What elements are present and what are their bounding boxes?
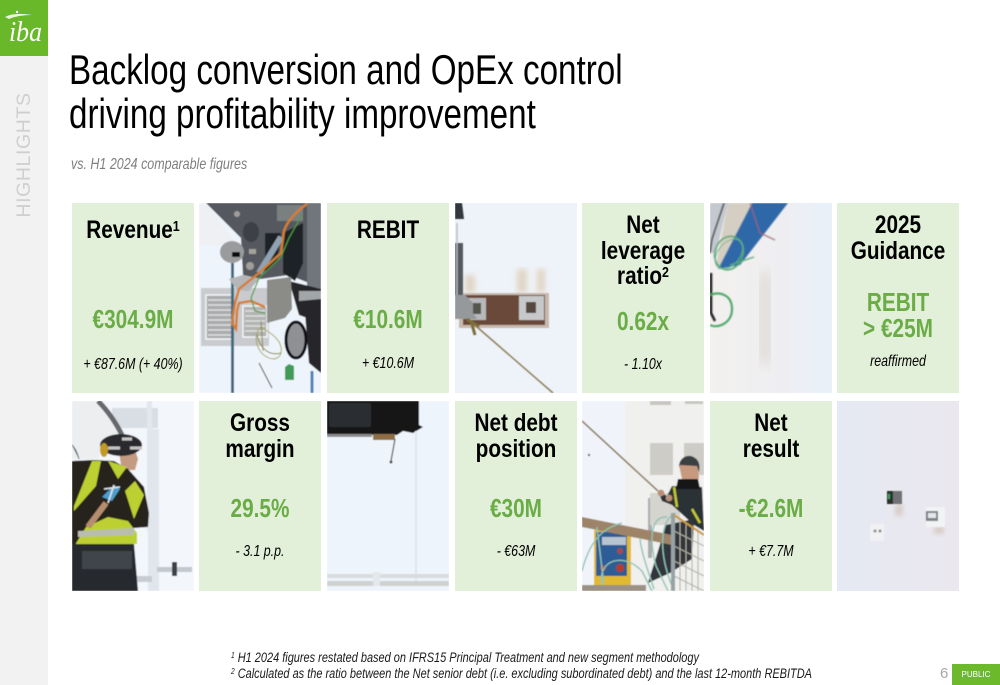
revenue value: €304.9M [93, 306, 173, 334]
guidance value [863, 289, 933, 342]
net leverage ratio heading [601, 211, 685, 290]
net result heading: Net [754, 409, 788, 437]
REBIT change: + €10.6M [362, 355, 414, 372]
net debt position heading [474, 409, 558, 462]
badge: public: PUBLIC [962, 670, 990, 679]
net debt position value: €30M [490, 495, 542, 523]
guidance heading: Guidance [851, 236, 945, 264]
gross margin heading: Gross [230, 409, 290, 437]
panel: REBIT [327, 203, 449, 393]
sidebar [0, 0, 48, 685]
logo: iba [9, 17, 42, 48]
gross margin heading: margin [225, 434, 295, 462]
title [69, 46, 623, 137]
guidance heading: 2025 [875, 211, 921, 239]
net leverage ratio change: - 1.10x [624, 356, 662, 373]
sidebar label: highlights: HIGHLIGHTS [13, 92, 35, 218]
badge: public [952, 664, 1000, 685]
panel: 2025 guidance [837, 203, 959, 393]
title: Backlog conversion and OpEx control [69, 46, 623, 93]
photo: wall with switches [837, 401, 959, 591]
logo [0, 0, 48, 56]
revenue heading: Revenue1 [86, 216, 180, 244]
net debt position heading: position [476, 434, 556, 462]
net result value: -€2.6M [739, 495, 803, 523]
gross margin heading [225, 409, 295, 462]
net leverage ratio value: 0.62x [617, 308, 669, 336]
guidance heading [851, 211, 945, 264]
panel: net leverage ratio [582, 203, 704, 393]
panel: gross margin [199, 401, 321, 591]
net leverage ratio heading: ratio2 [617, 262, 669, 290]
guidance value: REBIT [867, 289, 929, 317]
footnotes: 1 H1 2024 figures restated based on IFRS15 Principal Treatment and new segment methodology [231, 650, 699, 666]
photo: technician pulling rope on scaffold [582, 401, 704, 591]
net leverage ratio heading: leverage [601, 236, 685, 264]
net result change: + €7.7M [748, 543, 794, 560]
net result heading [743, 409, 800, 462]
footnotes: 2 Calculated as the ratio between the Net senior debt (i.e. excluding subordinated debt) and the last 12-month REBITDA [231, 666, 812, 682]
photo: wall plate and rope [455, 203, 577, 393]
photo: blue pipe and green cables [710, 203, 832, 393]
guidance value: > €25M [863, 314, 933, 342]
REBIT heading: REBIT [357, 216, 419, 244]
gross margin change: - 3.1 p.p. [236, 543, 284, 560]
net debt position change: - €63M [497, 543, 535, 560]
subtitle: vs. H1 2024 comparable figures [71, 156, 247, 173]
net leverage ratio heading: Net [626, 211, 660, 239]
net result heading: result [743, 434, 799, 462]
footnotes [231, 650, 812, 682]
REBIT value: €10.6M [353, 306, 423, 334]
page number: 6 [940, 665, 948, 682]
net debt position heading: Net debt [474, 409, 558, 437]
panel: net result [710, 401, 832, 591]
photo: technician in hi-vis vest [72, 401, 194, 591]
title: driving profitability improvement [69, 90, 536, 137]
guidance status: reaffirmed [870, 353, 926, 370]
panel: net debt position [455, 401, 577, 591]
revenue change: + €87.6M (+ 40%) [83, 356, 183, 373]
photo: cabling and vent [199, 203, 321, 393]
photo: equipment at top of white wall [327, 401, 449, 591]
panel: revenue [72, 203, 194, 393]
gross margin value: 29.5% [231, 495, 289, 523]
